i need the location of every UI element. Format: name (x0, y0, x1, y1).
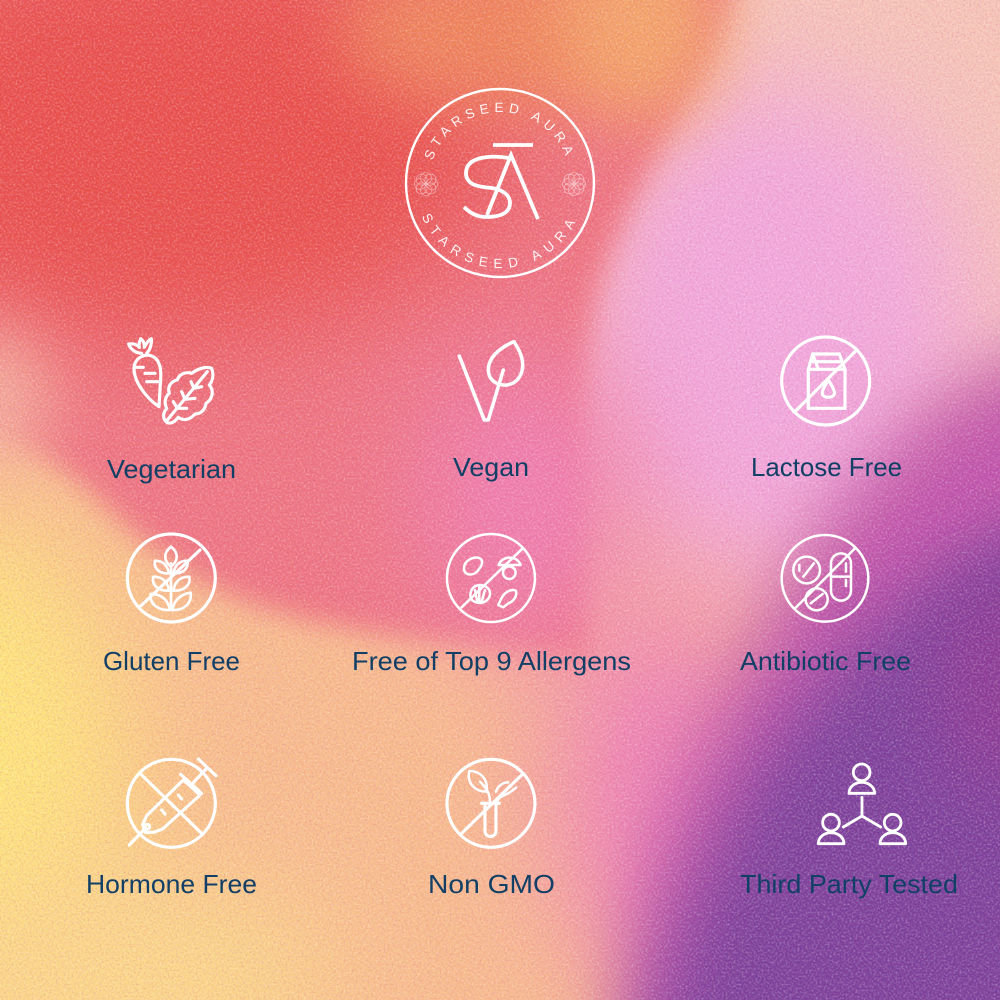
label: Free of Top 9 Allergens: Free of Top 9 Allergens (352, 646, 631, 676)
label: Vegan: Vegan (453, 452, 529, 482)
logo text bottom: STARSEED AURA (422, 214, 576, 268)
icon: third party tested people (818, 764, 906, 844)
label: Lactose Free: Lactose Free (751, 452, 902, 482)
logo: Starseed Aura badge (404, 88, 596, 278)
label: Gluten Free: Gluten Free (103, 646, 240, 676)
icon: non GMO plant in test tube (447, 759, 535, 847)
icon: antibiotic free pills (782, 535, 868, 622)
logo text top: STARSEED AURA (425, 102, 573, 160)
logo flower right (562, 172, 586, 196)
icon: vegetarian carrot and leaf (129, 339, 213, 423)
logo monogram SA (464, 145, 538, 219)
label: Vegetarian: Vegetarian (107, 454, 236, 484)
label: Non GMO: Non GMO (428, 869, 555, 899)
label: Antibiotic Free: Antibiotic Free (740, 646, 911, 676)
icon: free of top 9 allergens (447, 534, 535, 622)
logo flower left (414, 172, 438, 196)
label: Third Party Tested: Third Party Tested (740, 869, 958, 899)
icon: vegan V with leaf (459, 342, 523, 420)
icon: hormone free syringe (127, 759, 216, 847)
label: Hormone Free: Hormone Free (86, 869, 257, 899)
icon: lactose free carton (782, 337, 870, 425)
icon: gluten free wheat (127, 534, 215, 622)
